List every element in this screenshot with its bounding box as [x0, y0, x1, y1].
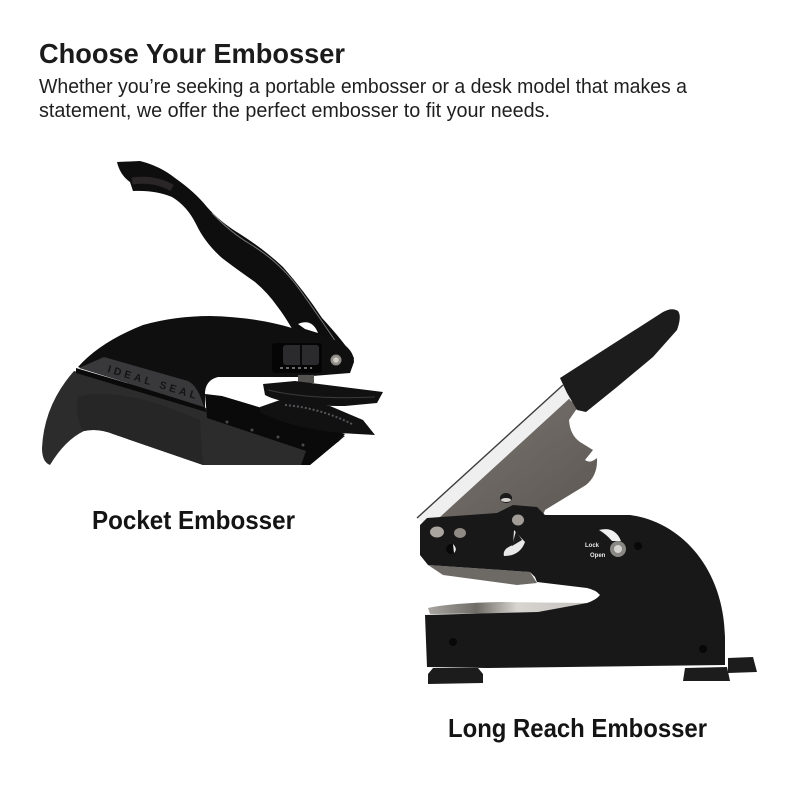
pocket embosser handle — [117, 161, 354, 373]
lever window and pivot — [272, 343, 342, 373]
die discs — [260, 375, 383, 435]
intro text — [39, 76, 688, 122]
lower arm dots — [226, 420, 304, 446]
pocket embosser label: Pocket Embosser — [92, 505, 295, 535]
IDEAL SEAL plate: IDEAL SEAL — [106, 363, 198, 402]
steel lever plate — [417, 385, 597, 522]
shaded facet on lower body — [77, 394, 203, 465]
pocket embosser lower body — [42, 371, 345, 465]
body rivets — [430, 493, 707, 653]
pocket embosser upper body — [78, 316, 354, 408]
seam between plate and lower body — [76, 368, 206, 412]
title: Choose Your Embosser — [39, 38, 345, 69]
lower arm black strip — [205, 394, 345, 451]
feet — [428, 657, 757, 684]
lock and open switch — [585, 529, 626, 559]
lower die — [428, 602, 590, 614]
upper die — [428, 565, 537, 585]
IDEAL SEAL plate — [79, 357, 204, 407]
intro text: statement, we offer the perfect embosser to fit your needs. — [39, 100, 550, 122]
pocket embosser product illustration — [42, 161, 383, 465]
long reach embosser label: Long Reach Embosser — [448, 713, 707, 743]
rear black wedge — [301, 440, 340, 465]
rubber handle grip — [560, 309, 680, 412]
lock and open switch: Open — [590, 553, 606, 559]
black cast body — [420, 505, 725, 668]
intro text: Whether you’re seeking a portable embosser or a desk model that makes a — [39, 76, 688, 98]
long reach embosser product illustration — [417, 309, 757, 684]
lock and open switch: Lock — [585, 543, 600, 549]
